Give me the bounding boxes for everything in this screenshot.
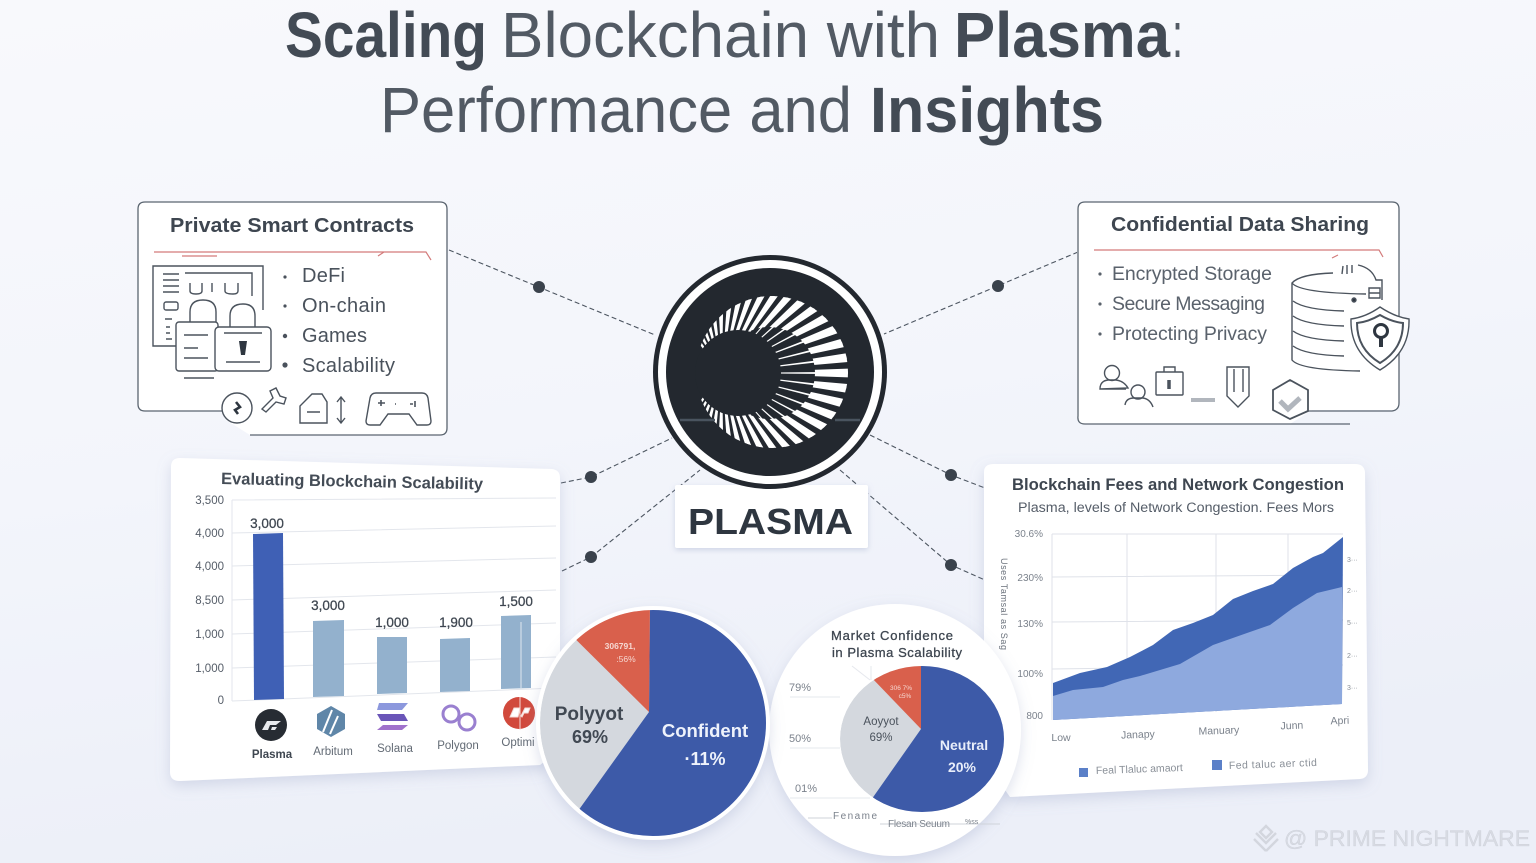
slice labels: c5% [899,693,912,700]
right axis labels: 2··· [1347,653,1358,660]
red rule [1094,250,1383,258]
title: Performance and [380,74,852,146]
x axis labels: Low [1051,732,1071,744]
pie axis lines and labels: 01% [795,783,817,795]
icon row: users, lock, dash, pin, hexagon [1100,366,1308,419]
area chart [1053,537,1343,720]
value labels: 3,000 [311,598,345,613]
chain names: Plasma [252,749,293,761]
title: Scaling [285,0,487,71]
connector nodes [533,280,1004,571]
red rule [154,252,431,260]
slice labels [863,685,988,775]
value labels [250,516,533,630]
chain names: Arbitum [313,746,353,758]
heading: Confidential Data Sharing [1111,213,1369,236]
x axis labels [1051,715,1349,744]
title: : [1172,0,1183,71]
panel: confidential data sharing [1077,202,1409,424]
sunburst thin rays [710,296,848,448]
slice labels: Confident [662,720,748,741]
plasma label: PLASMA [688,501,853,542]
chain icons [255,697,535,741]
icon row: token, wrench, folder, arrow, gamepad [222,388,431,425]
y axis labels [195,495,224,707]
bullet list [282,265,395,377]
y axis labels: 1,000 [195,663,224,675]
heading [831,628,962,660]
title: Insights [870,74,1104,146]
y axis labels: 230% [1017,573,1043,584]
chain names: Optimi [501,737,535,749]
bullet list: Encrypted Storage [1112,263,1272,285]
slice labels: 306 7% [890,685,912,692]
y axis labels: 1,000 [195,629,224,641]
pie slices [540,610,766,836]
icon: database with shield [1292,265,1409,371]
y axis labels: 800 [1026,711,1043,722]
panel: private smart contracts [138,202,447,435]
x axis labels: Junn [1280,720,1304,732]
right axis labels: 3··· [1347,685,1358,692]
slice labels: Polyyot [555,704,624,725]
panel: blockchain fees and network congestion [984,464,1368,797]
pie axis lines and labels [789,666,1000,830]
pie axis lines and labels: 79% [789,682,811,694]
right axis labels: 5··· [1347,620,1358,627]
heading: in Plasma Scalability [832,645,962,660]
y axis labels [1015,529,1043,722]
chain names: Polygon [437,740,479,752]
bars [253,533,531,700]
slice labels: 306791, [605,641,635,651]
slice labels: 69% [869,732,893,744]
title: Blockchain with [501,0,940,71]
sunburst thick rays [700,296,848,448]
y axis labels: 4,000 [195,528,224,540]
right axis labels [1347,557,1358,692]
value labels: 1,500 [499,594,533,609]
slice labels [555,641,748,769]
slice labels: Aoyyot [863,716,899,728]
subheading: Plasma, levels of Network Congestion. Fees Mors [1018,500,1334,515]
y axis labels: 130% [1017,619,1043,630]
slice labels: 69% [572,727,608,747]
bullet list: Games [302,325,367,347]
value labels: 3,000 [250,516,284,531]
pie chart: confident [536,600,790,850]
watermark: @ PRIME NIGHTMARE [1284,826,1530,851]
right axis labels: 3··· [1347,557,1358,564]
y axis labels: 0 [218,695,224,707]
y axis labels: 30.6% [1015,529,1043,540]
plasma label [675,485,868,548]
x axis labels: Janapy [1121,728,1156,742]
pie axis lines and labels: Fename [833,811,877,822]
plasma logo [653,255,887,489]
legend: Feal Tlaluc amaort [1096,762,1183,777]
slice labels: ·11% [684,749,726,769]
y axis labels: 8,500 [195,595,224,607]
pie axis lines and labels: Flesan Seuum [888,819,950,830]
bullet list: On-chain [302,295,386,317]
bullet list: Secure Messaging [1112,293,1265,315]
bullet list: Protecting Privacy [1112,323,1267,345]
grid lines [232,498,556,701]
x axis labels: Apri [1330,715,1349,727]
legend [1079,757,1317,777]
heading: Private Smart Contracts [170,215,414,237]
pie chart: market confidence inset [769,604,1021,856]
dashed connectors [449,250,1078,580]
y axis labels: 100% [1017,669,1043,680]
y axis title: Uses Tamsal as Sag [999,558,1009,650]
panel: evaluating blockchain scalability [170,458,560,781]
heading: Evaluating Blockchain Scalability [221,470,484,494]
value labels: 1,900 [439,615,473,630]
pie axis lines and labels: 50% [789,733,811,745]
slice labels: 20% [948,759,977,775]
heading: Blockchain Fees and Network Congestion [1012,476,1344,494]
chain names [252,737,535,761]
icon: contract document with padlocks [153,266,271,378]
y axis labels: 4,000 [195,561,224,573]
legend: Fed taluc aer ctid [1229,757,1317,772]
x axis labels: Manuary [1198,724,1240,738]
slice labels: Neutral [940,737,988,753]
slice labels: :56% [616,654,636,664]
pie slices [840,666,1004,812]
chain names: Solana [377,743,414,755]
icon: diamond logo [1254,826,1278,851]
pie axis lines and labels: %ss [965,819,979,826]
title [285,0,1183,146]
bullet list: Scalability [302,355,395,377]
right axis labels: 2··· [1347,588,1358,595]
value labels: 1,000 [375,615,409,630]
y axis labels: 3,500 [195,495,224,507]
bullet list [1098,263,1272,345]
title: Plasma [954,0,1170,71]
heading: Market Confidence [831,628,953,643]
grid lines [1052,534,1343,720]
bullet list: DeFi [302,265,345,287]
